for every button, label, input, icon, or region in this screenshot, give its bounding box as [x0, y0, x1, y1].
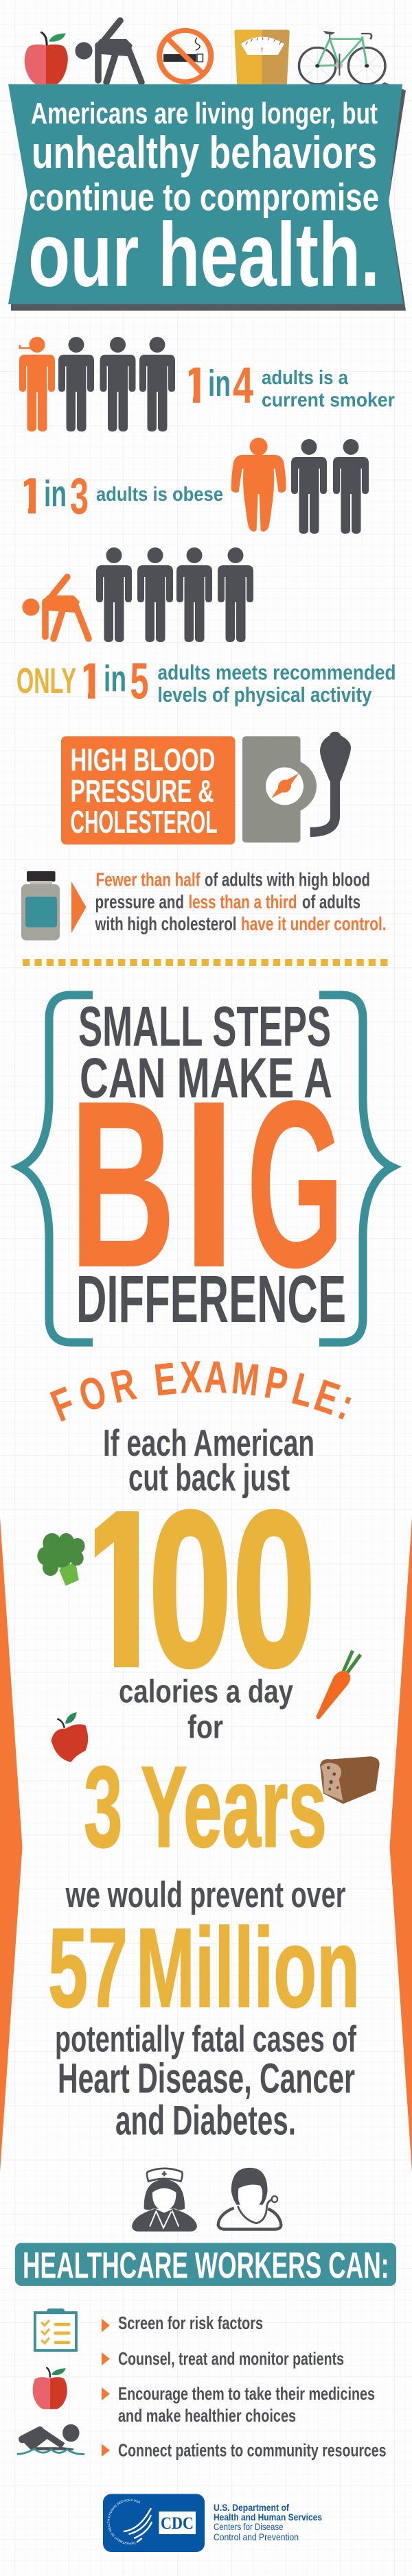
bullet 3 — [102, 2383, 375, 2426]
CDC mark: CDC — [161, 2514, 194, 2533]
icon: carrot — [317, 1651, 360, 1719]
big word: I — [181, 1051, 238, 1317]
icon: blood pressure cuff — [242, 732, 351, 842]
text: agency name: U.S. Department of — [214, 2503, 289, 2513]
bullet 2: Counsel, treat and monitor patients — [118, 2348, 344, 2369]
text: blood pressure control: of adults — [302, 891, 360, 912]
text: if each american: If each American — [103, 1421, 314, 1464]
curved heading: for example: X — [179, 1352, 203, 1403]
section: small steps can make a big difference — [20, 995, 392, 1343]
stat: 1 in 3 obese — [24, 477, 222, 515]
panel: high blood pressure and cholesterol: CHOLESTEROL — [70, 804, 217, 840]
icon: bicycle — [299, 31, 386, 84]
number: 100: 00 — [148, 1466, 316, 1713]
stat: only 1 in 5 active: 5 — [130, 652, 148, 709]
icon: bread — [320, 1756, 380, 1804]
stat: 1 in 3 obese: 3 — [70, 468, 89, 525]
bullet 3: and make healthier choices — [118, 2405, 296, 2426]
text: potentially fatal cases — [55, 2019, 357, 2144]
stat: 1 in 3 obese: in — [44, 473, 67, 515]
curved heading: for example: M — [229, 1353, 262, 1406]
heading lines — [76, 995, 346, 1336]
stat: only 1 in 5 active: in — [104, 659, 126, 700]
number: 100: 1 — [76, 1466, 170, 1713]
curved heading: for example: O — [73, 1367, 113, 1422]
number: 57 million: 57 — [48, 1905, 128, 2031]
orange side wedges — [0, 1517, 412, 2172]
panel: high blood pressure and cholesterol: PRESSURE & — [70, 773, 214, 809]
row: physical activity pictogram — [22, 547, 253, 642]
arrow — [71, 882, 87, 933]
curved heading: for example: L — [287, 1364, 319, 1417]
curved heading: for example: : — [332, 1380, 360, 1430]
panel: high blood pressure and cholesterol — [61, 736, 235, 844]
icon: checklist — [35, 2308, 76, 2350]
curved heading: for example: P — [261, 1358, 292, 1411]
stat: 1 in 4 smokers: current smoker — [262, 390, 395, 412]
big word — [69, 1051, 344, 1317]
number: 57 million — [48, 1905, 360, 2031]
text: blood pressure control — [95, 869, 386, 934]
curved heading: for example: E — [308, 1370, 345, 1425]
row: smokers pictogram — [19, 337, 175, 432]
icon: pill bottle — [21, 871, 60, 941]
text: blood pressure control: pressure and — [95, 891, 184, 912]
icon: apple — [33, 2367, 67, 2409]
stat: 1 in 3 obese: 1 — [16, 468, 46, 525]
text: agency name: Centers for Disease — [214, 2522, 283, 2532]
seal text: DEPARTMENT OF HEALTH & HUMAN SERVICES USA — [107, 2498, 140, 2545]
text: agency name: Control and Prevention — [214, 2532, 299, 2542]
text: calories a day for — [119, 1673, 293, 1745]
icon: weight scale — [234, 29, 290, 84]
stat: 1 in 4 smokers: 1 — [183, 357, 209, 414]
icon: no smoking sign — [159, 30, 211, 82]
curved heading: for example: E — [152, 1354, 179, 1406]
banner: headline — [8, 82, 406, 311]
icon: stretching figure — [75, 21, 141, 82]
text: blood pressure control: less than a third — [188, 891, 297, 912]
curved heading: for example — [45, 1352, 360, 1432]
icon: broccoli — [37, 1533, 85, 1586]
logo: HHS and CDC — [103, 2494, 205, 2552]
stat: only 1 in 5 active — [17, 663, 395, 707]
icon: nurse — [132, 2169, 197, 2232]
number: 100 — [95, 1509, 311, 1670]
left brace — [20, 995, 93, 1343]
bullet 1: Screen for risk factors — [118, 2313, 263, 2333]
curved heading: for example: A — [203, 1352, 229, 1403]
text: blood pressure control: with high cholesterol — [95, 913, 236, 934]
curved heading: for example: F — [45, 1378, 82, 1432]
icon: doctor — [218, 2168, 281, 2230]
text: blood pressure control: Fewer than half — [96, 869, 201, 890]
text: calories a day for: for — [187, 1708, 223, 1745]
row: obesity pictogram — [231, 438, 369, 534]
stat: only 1 in 5 active: ONLY — [16, 661, 76, 701]
stat: 1 in 4 smokers: 4 — [233, 357, 253, 414]
text: calories a day for: calories a day — [119, 1673, 293, 1710]
right brace — [319, 995, 392, 1343]
panel: high blood pressure and cholesterol: HIGH BLOOD — [70, 742, 216, 777]
text: if each american: cut back just — [128, 1456, 290, 1499]
stat: 1 in 4 smokers: adults is a — [262, 367, 349, 389]
icon: apple — [25, 32, 68, 84]
stat: only 1 in 5 active: levels of physical activity — [158, 683, 372, 707]
text: agency name: Health and Human Services — [214, 2512, 322, 2522]
stat: only 1 in 5 active: 1 — [77, 652, 104, 709]
list: healthcare actions — [102, 2313, 386, 2460]
icon: small apple — [52, 1712, 88, 1762]
text: potentially fatal cases: and Diabetes. — [115, 2098, 296, 2144]
headline text — [28, 97, 380, 305]
stat: 1 in 4 smokers: in — [208, 363, 231, 404]
header icons — [25, 21, 386, 84]
text: if each american — [103, 1421, 314, 1499]
curved heading: for example: R — [106, 1359, 140, 1413]
stat: 1 in 4 smokers — [189, 368, 395, 407]
eagle — [124, 2508, 152, 2542]
stat: 1 in 3 obese: adults is obese — [96, 484, 223, 506]
big word: B — [69, 1051, 176, 1317]
text: agency name — [214, 2503, 322, 2542]
icon: swimmer — [17, 2424, 84, 2454]
